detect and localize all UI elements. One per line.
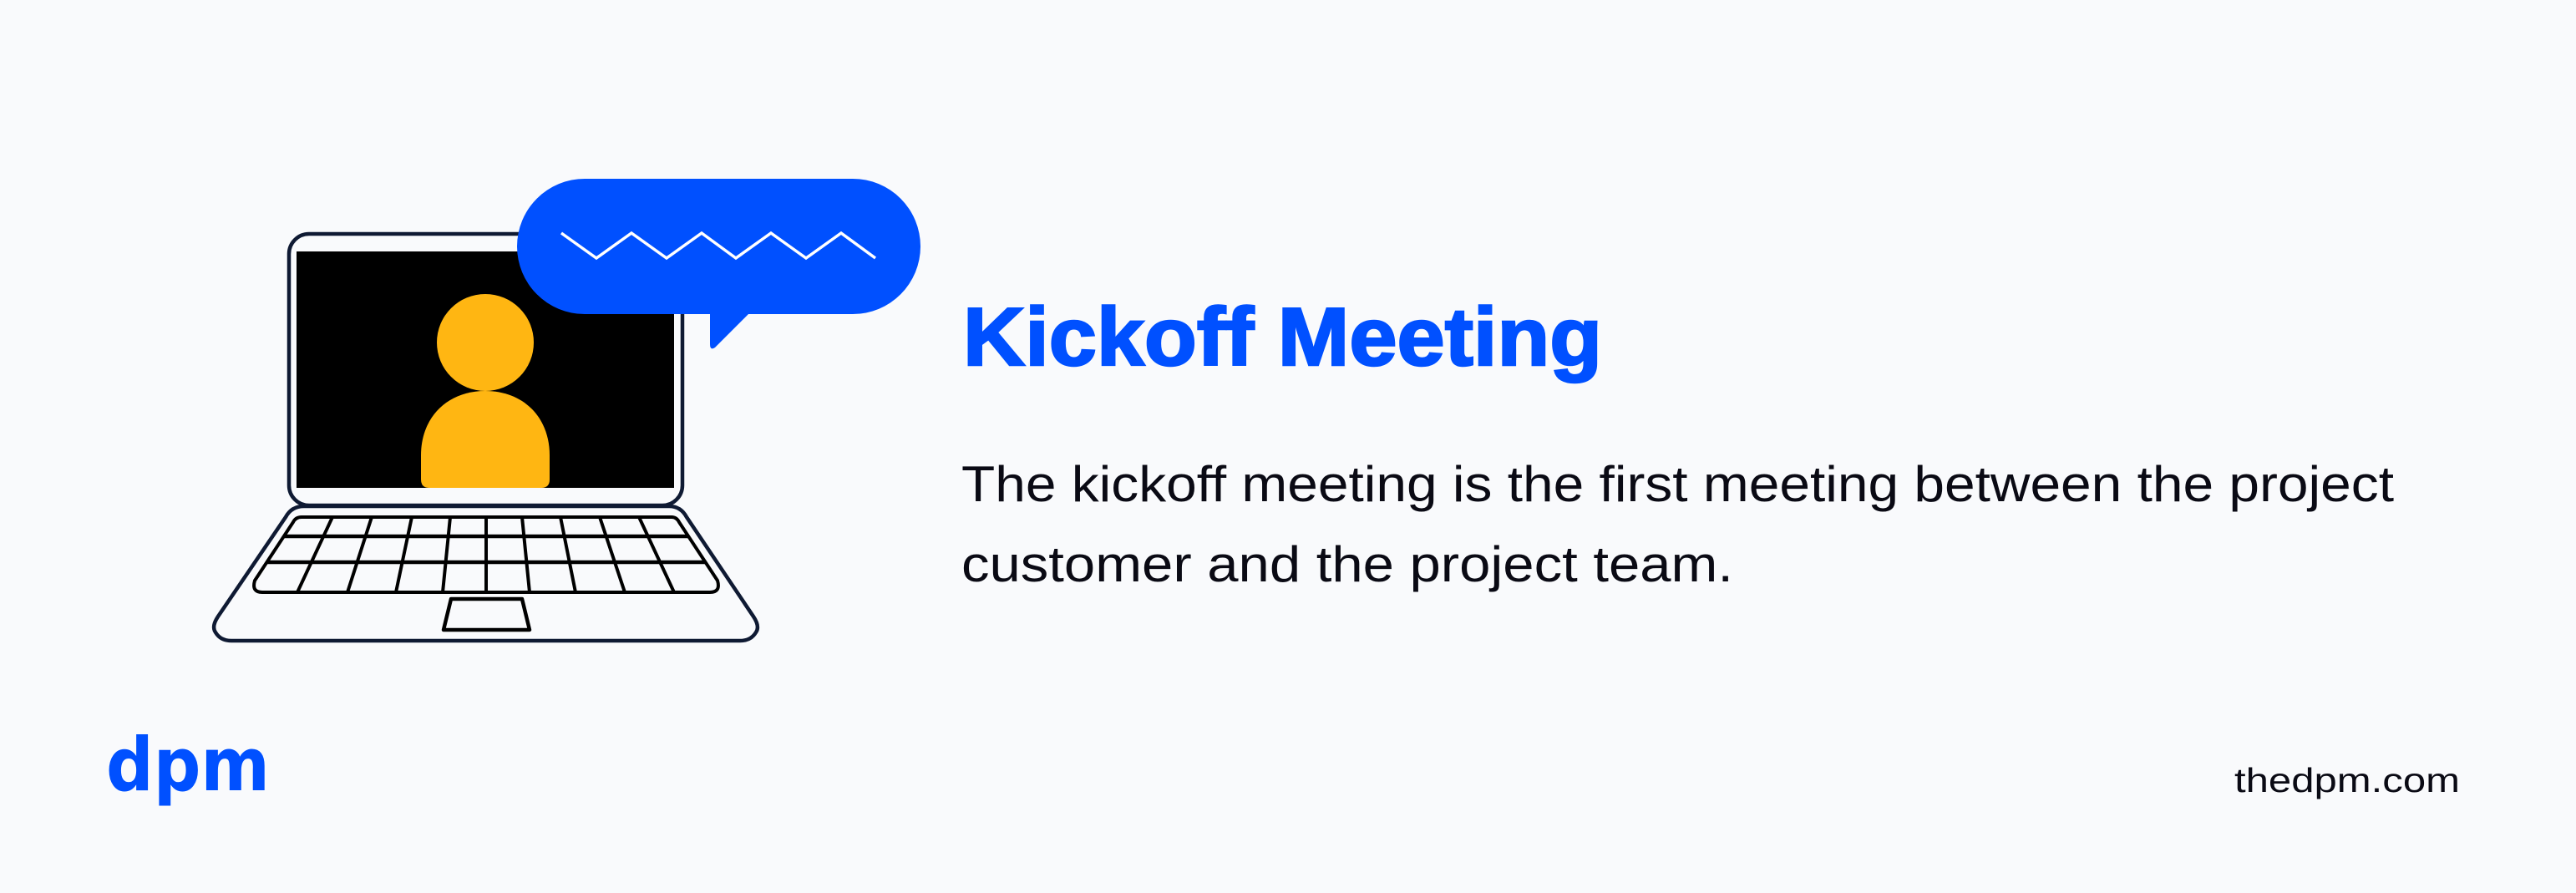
person body: [421, 391, 550, 488]
bubble squiggle: [561, 233, 875, 258]
icon: person: [421, 294, 550, 488]
laptop base: [214, 506, 758, 641]
description line 1: The kickoff meeting is the first meeting between the project: [961, 456, 2394, 512]
description line 2: customer and the project team.: [961, 536, 1733, 592]
keyboard outline: [254, 517, 718, 592]
icon: laptop with video call: [214, 179, 920, 641]
logo: dpm: dpm: [106, 722, 270, 808]
bubble body and tail: [517, 179, 920, 348]
website url: thedpm.com: [2234, 761, 2460, 799]
trackpad: [444, 599, 530, 630]
title: Kickoff Meeting: [963, 291, 1602, 383]
person head: [437, 294, 534, 391]
keyboard columns: [297, 517, 674, 592]
speech bubble: [517, 179, 920, 348]
keyboard rows: [267, 536, 706, 562]
keyboard: [254, 517, 718, 630]
screen display: [297, 251, 674, 488]
laptop screen frame: [289, 234, 682, 505]
description text: [961, 456, 2394, 592]
